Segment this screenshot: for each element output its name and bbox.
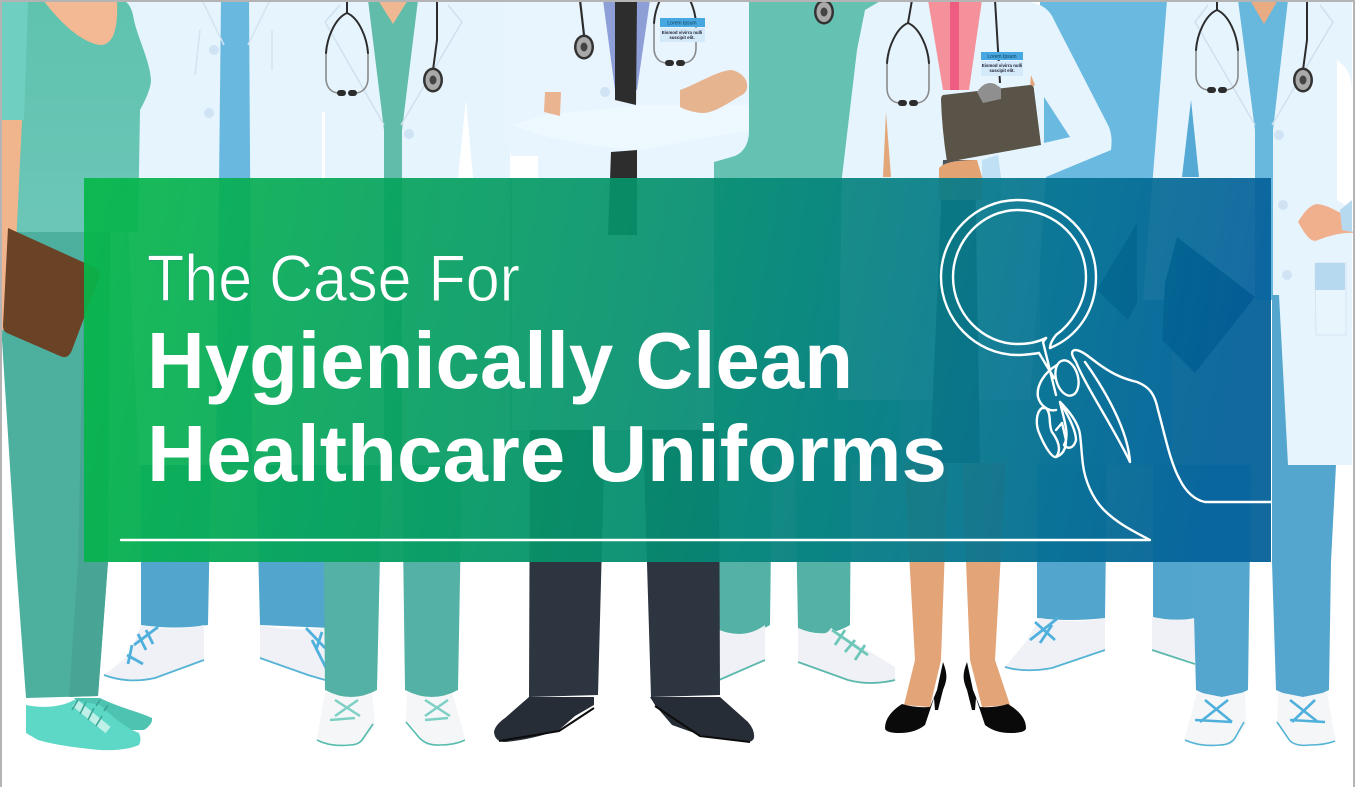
title text: Healthcare Uniforms [147,409,947,498]
figure: back doctor in blue scrubs, left [104,0,330,680]
white coat [320,0,510,465]
brown clipboard [3,228,100,357]
hand [1298,204,1353,241]
name badge: Eismod vivirra nulli [662,30,702,35]
underline and lower hand outline [121,402,1150,540]
title banner [84,178,1271,562]
neck skin [43,0,117,45]
coat vent [1182,100,1199,177]
arm [2,120,22,330]
icon: line-art hand holding magnifying glass, with underline [121,200,1271,540]
back shoe [74,698,152,730]
skin strip [883,112,891,177]
name badge: Lorem Ipsum [987,54,1017,60]
curled fingers [1038,365,1057,410]
front shoe [26,700,140,750]
blue trousers [1037,465,1200,620]
stethoscope chest piece [814,0,834,24]
blue scrub top [1238,0,1288,300]
teal trousers [323,465,462,697]
underlay behind banner [84,178,1271,562]
hand right [680,70,747,113]
left stethoscope tube [580,0,584,35]
title text [147,241,947,498]
white coat [1143,0,1352,465]
sneakers [719,625,765,680]
teal trousers [2,232,110,698]
white coat [118,0,330,465]
high heels [885,662,946,733]
banner gradient panel [84,178,1271,562]
shirt and tie [603,0,650,90]
clipboard clip [977,83,1001,103]
neck skin [1250,0,1278,24]
sleeve [2,0,28,120]
title text: The Case For [147,241,520,315]
pink blouse [928,0,982,90]
hand and cuff [939,160,982,200]
figure: doctor with blue scrubs at right edge [1097,0,1353,745]
title text: Hygienically Clean [147,316,853,405]
white coat [503,0,749,430]
blue trousers [141,465,330,628]
white coat [838,0,1112,400]
name badge: suscipit elit. [669,35,695,40]
figure: doctor with clipboard and pink blouse [838,0,1112,733]
sneakers [317,692,375,746]
teal scrub top [368,0,418,465]
sneakers [1005,618,1105,670]
name badge [660,18,705,42]
finger ellipse [1052,358,1082,398]
magnifier handle [1039,338,1056,395]
figure: doctor with teal scrubs and stethoscope [317,0,510,746]
figure: central doctor with crossed arms [494,0,754,742]
figure: back nurse in teal scrubs, centre-right [710,0,900,683]
dress shoes [494,697,754,742]
blue scrub top [216,0,252,465]
teal trousers [719,465,851,634]
name badge: suscipit elit. [989,68,1015,73]
crossed arm shading [512,105,749,150]
name badge: Eismod vivirra nulli [982,63,1022,68]
teal tunic [2,0,151,232]
stethoscope [326,13,368,96]
magnifier outer ring [941,200,1096,355]
blue gap behind arm [1044,97,1070,143]
teal tunic [710,0,900,465]
magnifier inner ring [953,210,1086,348]
name badge: Lorem Ipsum [667,20,697,26]
blue trousers [1272,295,1336,697]
thumb [1030,75,1035,88]
figure: nurse in teal scrubs with brown clipboard, left edge [2,0,152,750]
dark clipboard seen through banner [1097,223,1255,373]
blue torso [1040,0,1172,465]
dark skirt seen through banner [930,160,980,463]
stethoscope [887,23,929,106]
bare legs [904,463,1010,707]
pocket [1315,263,1346,335]
name badge [981,52,1023,76]
upper hand outline [1072,350,1271,502]
hand left [544,92,561,116]
clipboard [941,85,1041,162]
sneakers [104,625,204,680]
stethoscope [1196,10,1238,93]
dark suit trousers [529,430,720,697]
sneakers [1185,692,1246,745]
white highlight strip [1337,60,1352,210]
neck skin [378,0,408,24]
figure: back doctor in blue scrubs, right [1005,0,1200,670]
